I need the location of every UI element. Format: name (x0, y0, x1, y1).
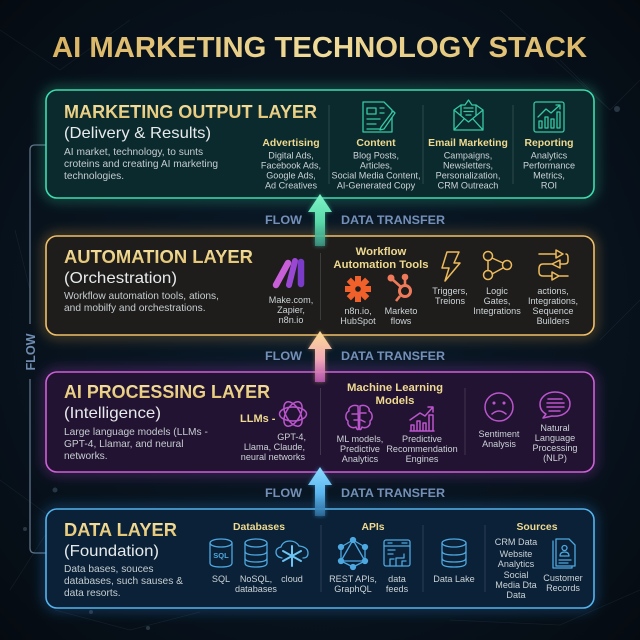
nlp label: Language (535, 433, 575, 443)
source list: CRM Data (495, 537, 538, 547)
tool labels: flows (391, 316, 412, 326)
tool labels (340, 306, 417, 326)
nlp label: (NLP) (543, 453, 567, 463)
dividers (321, 525, 485, 592)
column: content: Blog Posts, (353, 150, 399, 160)
description: and mobilfy and orchestrations. (64, 303, 206, 314)
column: content: AI-Generated Copy (337, 180, 416, 190)
icon: neural knot (280, 399, 306, 429)
arrow: data transfer to ai processing (308, 467, 332, 516)
api labels: GraphQL (334, 584, 372, 594)
description (64, 427, 208, 462)
flow label 3: DATA TRANSFER (341, 486, 445, 500)
llms label: LLMs - (240, 413, 276, 425)
actions label (528, 286, 578, 326)
api labels: feeds (386, 584, 409, 594)
flow side connector (23, 145, 46, 553)
icon: reporting chart (534, 102, 564, 132)
icon: cloud snowflake (276, 541, 308, 566)
flow label 2: DATA TRANSFER (341, 349, 445, 363)
flow side connector: FLOW (23, 333, 38, 370)
make tools label: n8n.io (279, 315, 303, 325)
column: reporting (523, 138, 575, 190)
ml labels: Predictive (340, 444, 380, 454)
database labels (212, 574, 303, 594)
heading: DATA LAYER (64, 520, 177, 540)
title: AI MARKETING TECHNOLOGY STACK (52, 32, 587, 64)
tool labels: HubSpot (340, 316, 376, 326)
column: advertising: Facebook Ads, (261, 160, 321, 170)
subheading: (Delivery & Results) (64, 125, 211, 142)
actions label: Sequence (533, 306, 573, 316)
column: reporting: Performance (523, 160, 575, 170)
actions label: Builders (537, 316, 570, 326)
machine learning heading (347, 382, 443, 407)
flow label 3 (265, 486, 445, 500)
column: advertising: Google Ads, (266, 170, 316, 180)
description (64, 291, 219, 314)
triggers label (432, 286, 468, 306)
make tools label (269, 295, 313, 325)
source list: Media Dta (495, 580, 538, 590)
flow label 3: FLOW (265, 486, 303, 500)
column: advertising: Advertising (262, 138, 320, 149)
database labels: databases (235, 584, 277, 594)
database labels: NoSQL, (240, 574, 272, 584)
make tools label: Zapier, (277, 305, 305, 315)
ml labels (337, 434, 458, 464)
column: content (332, 138, 420, 190)
machine learning heading: Machine Learning (347, 382, 443, 394)
heading: AUTOMATION LAYER (64, 247, 253, 267)
sentiment label: Analysis (482, 439, 516, 449)
customer records label (543, 573, 583, 593)
column: email marketing: Personalization, (436, 170, 500, 180)
column: reporting: Metrics, (533, 170, 565, 180)
column: email marketing: CRM Outreach (438, 180, 498, 190)
column: email marketing: Campaigns, (444, 150, 492, 160)
make tools label: Make.com, (269, 295, 313, 305)
description: GPT-4, Llamar, and neural (64, 439, 183, 450)
heading: MARKETING OUTPUT LAYER (64, 102, 317, 122)
source list: Analytics (498, 559, 535, 569)
description: Data bases, souces (64, 564, 153, 575)
customer records label: Customer (543, 573, 583, 583)
description: Large language models (LLMs - (64, 427, 208, 438)
subheading: (Intelligence) (64, 405, 161, 422)
logic label: Integrations (473, 306, 521, 316)
icon: data lake (442, 539, 466, 567)
ml labels: Engines (406, 454, 439, 464)
llm list: neural networks (241, 452, 305, 462)
icon: sad face (485, 393, 513, 421)
column: reporting: Reporting (524, 138, 574, 149)
flow label 1 (265, 213, 445, 227)
flow label 1: DATA TRANSFER (341, 213, 445, 227)
column: reporting: Analytics (531, 150, 568, 160)
icon: predictive chart (410, 407, 434, 431)
triggers label: Treions (435, 296, 465, 306)
sentiment label (479, 429, 520, 449)
sentiment label: Sentiment (479, 429, 520, 439)
logic label: Gates, (484, 296, 510, 306)
icon: graphql (338, 538, 368, 570)
tool labels: Marketo (385, 306, 417, 316)
column: advertising: Ad Creatives (265, 180, 317, 190)
logic label (473, 286, 521, 316)
icon: sql cylinder: SQL (213, 551, 229, 560)
triggers label: Triggers, (432, 286, 468, 296)
llm list: GPT-4, (277, 432, 306, 442)
description: databases, such sauses & (64, 576, 183, 587)
icon: sequence arrows (539, 250, 568, 280)
icon: customer record (553, 539, 575, 568)
icon: logic gates (484, 252, 512, 280)
api labels: REST APIs, (329, 574, 377, 584)
column: content: Content (356, 138, 396, 149)
database labels: cloud (281, 574, 303, 584)
ml labels: Predictive (402, 434, 442, 444)
icon: data feeds (384, 540, 410, 566)
arrow: data transfer to automation (308, 331, 332, 382)
icon: lightning (442, 252, 460, 281)
icon: email envelope (454, 100, 483, 130)
description: croteins and creating AI marketing (64, 159, 218, 170)
llm list: Llama, Claude, (244, 442, 305, 452)
llm list (241, 432, 306, 462)
subheading: (Orchestration) (64, 270, 177, 287)
description: Workflow automation tools, ations, (64, 291, 219, 302)
description (64, 564, 183, 599)
database labels: SQL (212, 574, 230, 584)
workflow automation heading: Workflow (356, 246, 407, 258)
panel: automation layer (46, 236, 594, 335)
description: technologies. (64, 171, 124, 182)
tool labels: n8n.io, (344, 306, 372, 316)
arrow: data transfer to output (308, 194, 332, 246)
icon: nosql stack (245, 539, 267, 567)
column: reporting: ROI (541, 180, 557, 190)
icon: hubspot (389, 275, 410, 301)
customer records label: Records (546, 583, 580, 593)
description: networks. (64, 451, 108, 462)
flow label 1: FLOW (265, 213, 303, 227)
panel: data layer (46, 509, 594, 608)
heading: AI PROCESSING LAYER (64, 382, 270, 402)
column: email marketing (428, 138, 508, 190)
databases heading: Databases (233, 522, 285, 533)
dividers (329, 105, 513, 184)
column: content: Social Media Content, (332, 170, 420, 180)
source list (495, 537, 538, 600)
nlp label (532, 423, 578, 463)
nlp label: Processing (532, 443, 578, 453)
data lake label: Data Lake (433, 574, 475, 584)
flow label 2: FLOW (265, 349, 303, 363)
source list: Website (500, 549, 532, 559)
sources heading: Sources (516, 522, 558, 533)
actions label: Integrations, (528, 296, 578, 306)
icon: sql cylinder (210, 539, 232, 567)
workflow automation heading: Automation Tools (333, 259, 429, 271)
description: AI market, technology, to sunts (64, 147, 203, 158)
logic label: Logic (486, 286, 508, 296)
icon: speech bubble (540, 392, 570, 418)
ml labels: Recommendation (386, 444, 458, 454)
nlp label: Natural (540, 423, 570, 433)
icon: content document (363, 102, 395, 132)
panel: marketing output layer (46, 90, 594, 198)
column: advertising (261, 138, 321, 190)
ml labels: ML models, (337, 434, 383, 444)
api labels (329, 574, 409, 594)
icon: zapier asterisk (345, 276, 371, 302)
machine learning heading: Models (376, 395, 414, 407)
dividers (320, 388, 465, 455)
subheading: (Foundation) (64, 543, 159, 560)
icon: brain (346, 405, 372, 430)
ml labels: Analytics (342, 454, 379, 464)
api labels: data (388, 574, 407, 584)
description: data resorts. (64, 588, 121, 599)
actions label: actions, (537, 286, 569, 296)
flow label 2 (265, 349, 445, 363)
workflow automation heading (333, 246, 429, 271)
dividers (320, 253, 322, 320)
source list: Data (506, 590, 527, 600)
source list: Social (504, 570, 528, 580)
column: content: Articles, (360, 160, 392, 170)
column: email marketing: Email Marketing (428, 138, 508, 149)
icon: make logo (276, 261, 301, 285)
description (64, 147, 218, 182)
column: email marketing: Newsletters, (443, 160, 493, 170)
apis heading: APIs (361, 522, 385, 533)
column: advertising: Digital Ads, (268, 150, 314, 160)
panel: ai processing layer (46, 372, 594, 472)
